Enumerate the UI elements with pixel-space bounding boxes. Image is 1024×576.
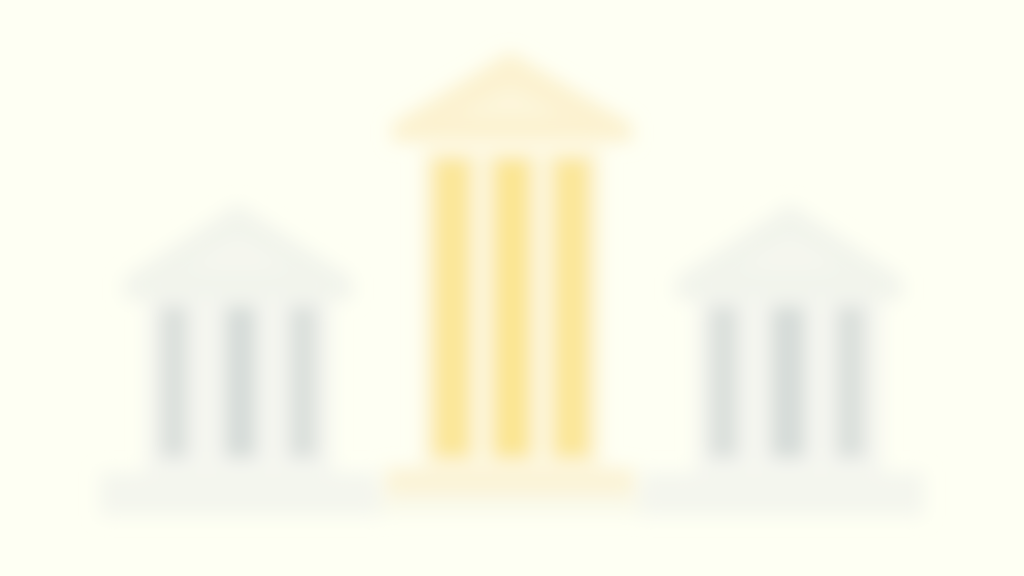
right temple — [640, 204, 924, 516]
center temple — [380, 52, 640, 514]
left temple base — [100, 472, 380, 516]
left temple — [100, 204, 380, 516]
right temple base — [640, 472, 924, 516]
left temple roof — [124, 204, 352, 300]
center temple base — [380, 468, 640, 514]
right temple roof — [676, 204, 902, 300]
center temple roof — [392, 52, 632, 142]
center temple columns — [422, 148, 602, 466]
left temple columns — [146, 300, 332, 472]
right temple columns — [696, 300, 882, 472]
